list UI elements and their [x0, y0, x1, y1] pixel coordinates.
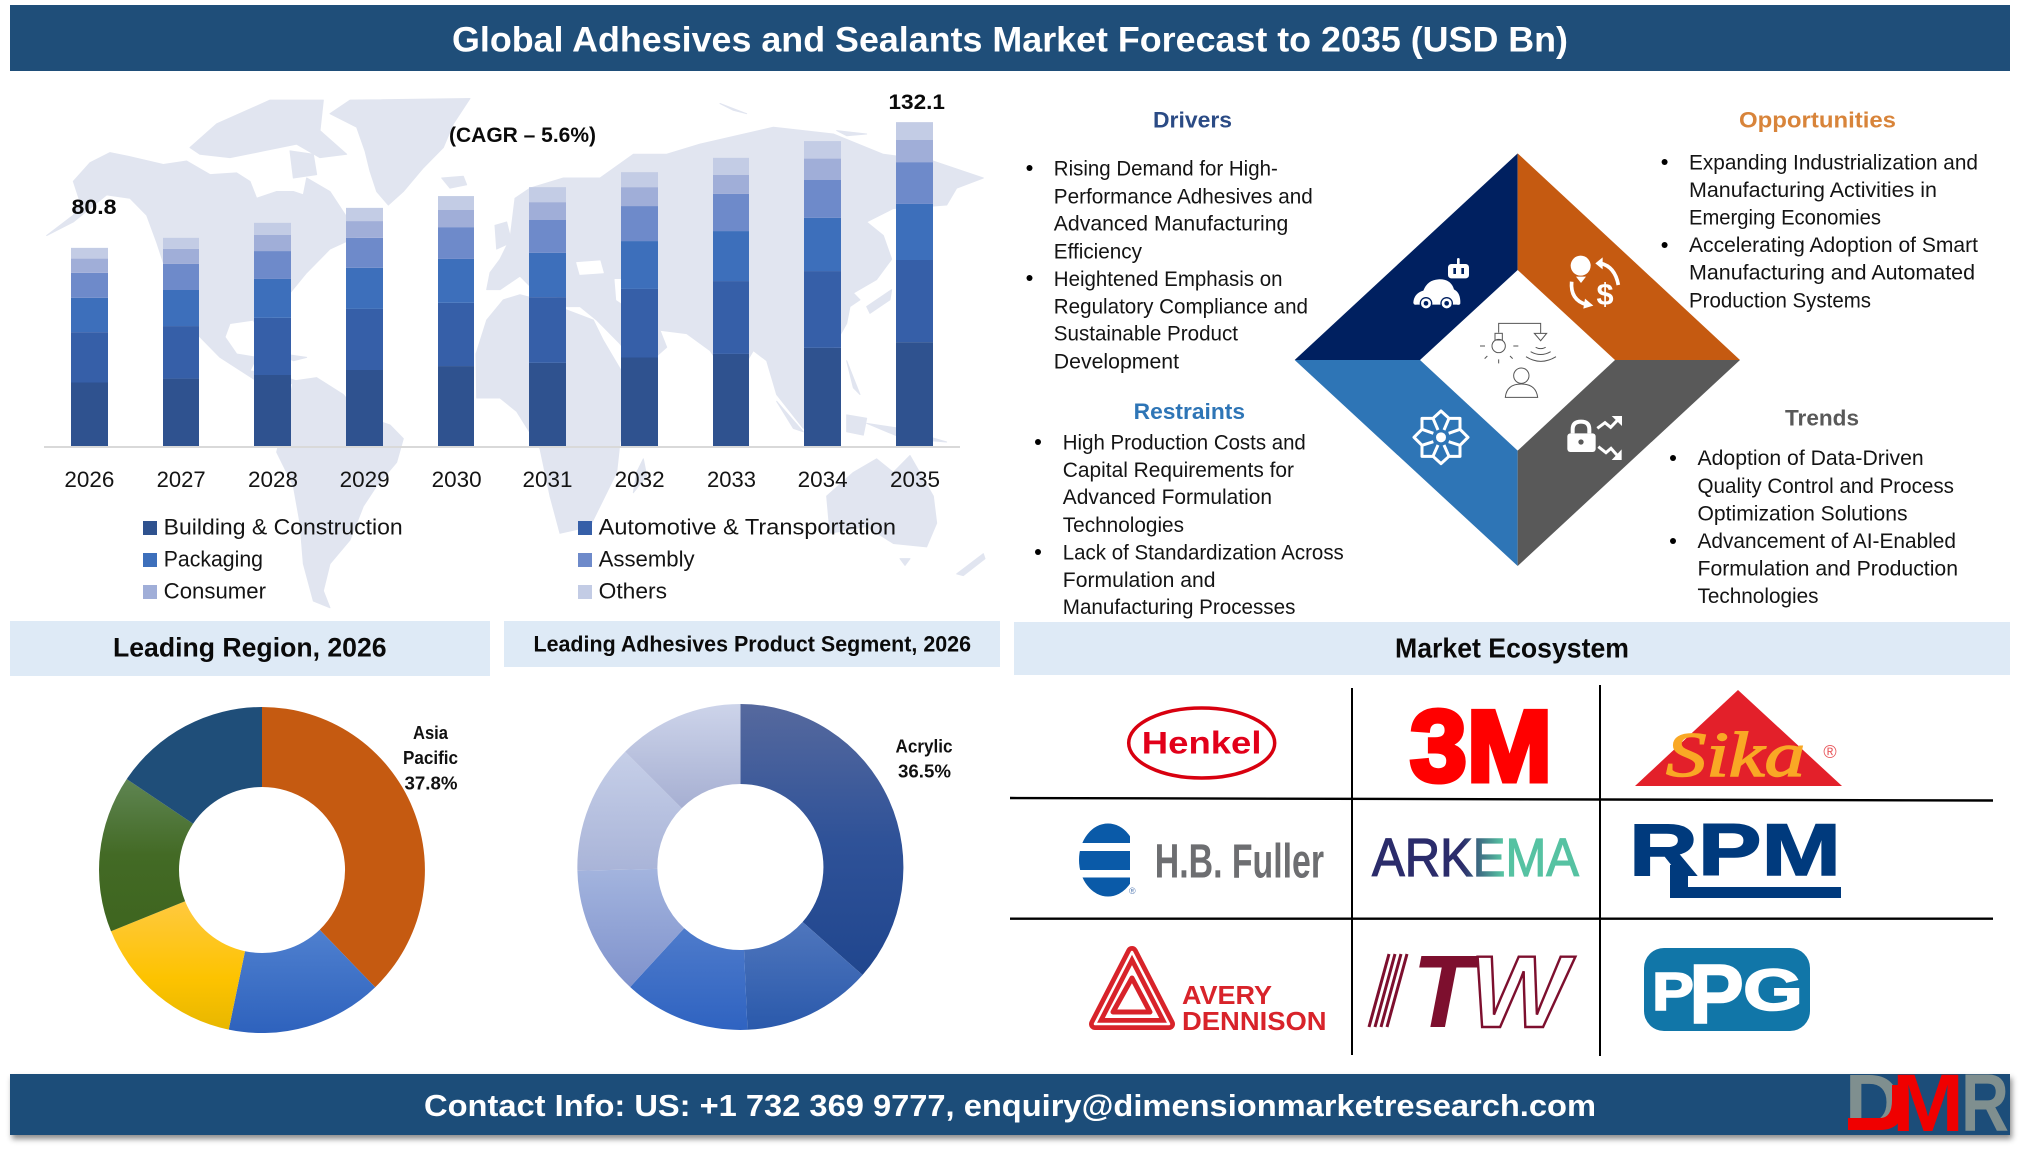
restraints list: Capital Requirements for	[1063, 459, 1294, 482]
stacked bar chart	[44, 91, 960, 492]
panel: drivers	[1026, 108, 1313, 374]
drivers list: Heightened Emphasis on	[1054, 268, 1282, 291]
logo: DMR: R	[1961, 1058, 2009, 1149]
label: acrylic: Acrylic	[896, 737, 952, 757]
drivers list: Efficiency	[1054, 241, 1142, 264]
world map background	[47, 98, 985, 608]
value label 2026: 80.8	[72, 196, 117, 219]
logo: DMR	[1845, 1058, 2009, 1149]
chart legend: Packaging	[164, 546, 263, 571]
year axis labels	[64, 467, 940, 492]
logo: henkel: Henkel	[1142, 724, 1262, 760]
logo: ppg: P	[1652, 962, 1694, 1022]
heading bar: leading product segment: Leading Adhesives Product Segment, 2026	[534, 632, 971, 656]
logo: DMR: M	[1892, 1058, 1964, 1149]
quadrant: restraints	[1295, 360, 1518, 566]
label: asia pacific: Asia	[413, 723, 449, 743]
chart legend: Assembly	[599, 546, 695, 571]
restraints list: Manufacturing Processes	[1063, 596, 1295, 619]
year axis labels: 2027	[157, 467, 206, 492]
heading bar: leading region	[10, 621, 490, 676]
icon: idea money cycle: $	[1596, 278, 1614, 312]
contact banner: Contact Info: US: +1 732 369 9777, enquiry@dimensionmarketresearch.com	[424, 1089, 1596, 1123]
logo: ppg: P	[1689, 947, 1744, 1041]
value label 2035: 132.1	[888, 91, 945, 114]
label: acrylic	[896, 737, 952, 782]
CAGR label: (CAGR – 5.6%)	[449, 124, 596, 147]
label: acrylic: 36.5%	[898, 762, 951, 782]
chart bars	[71, 122, 933, 446]
logo: avery dennison: DENNISON	[1182, 1008, 1327, 1036]
logo: ppg	[1644, 947, 1810, 1041]
logo: h.b. fuller: ®	[1129, 886, 1136, 896]
restraints list: Formulation and	[1063, 569, 1216, 592]
year axis labels: 2034	[798, 467, 848, 492]
panel: trends	[1670, 405, 1958, 608]
opportunities list: Manufacturing Activities in	[1689, 179, 1937, 202]
logo: itw	[1369, 934, 1576, 1049]
panel: opportunities	[1662, 108, 1978, 312]
market ecosystem logo grid	[1010, 685, 1993, 1056]
icon: flower network	[1414, 411, 1468, 464]
contact banner	[10, 1074, 2010, 1135]
quadrant: opportunities	[1518, 153, 1740, 360]
title banner: Global Adhesives and Sealants Market Forecast to 2035 (USD Bn)	[452, 20, 1568, 60]
label: asia pacific: Pacific	[403, 748, 458, 768]
icon: center sensor and person	[1480, 323, 1556, 397]
icon: lock and trends	[1567, 416, 1622, 460]
trends list: Technologies	[1698, 585, 1818, 608]
logo: 3M: 3M	[1410, 691, 1552, 803]
year axis labels: 2029	[340, 467, 390, 492]
logo: itw: W	[1470, 935, 1576, 1049]
restraints list	[1035, 431, 1344, 619]
quadrant: trends	[1518, 360, 1740, 566]
drivers list: Performance Adhesives and	[1054, 186, 1313, 209]
year axis labels: 2026	[64, 467, 114, 492]
logo: sika: Sika	[1666, 719, 1805, 790]
heading: opportunities: Opportunities	[1739, 108, 1896, 132]
drivers list: Advanced Manufacturing	[1054, 213, 1288, 236]
heading bar: market ecosystem: Market Ecosystem	[1395, 633, 1629, 664]
chart legend: Automotive & Transportation	[599, 514, 896, 540]
trends list: Formulation and Production	[1698, 558, 1958, 581]
restraints list: Advanced Formulation	[1063, 486, 1272, 509]
drivers list: Rising Demand for High-	[1054, 158, 1278, 181]
diamond diagram	[1295, 153, 1740, 566]
heading: trends: Trends	[1785, 405, 1859, 430]
opportunities list: Expanding Industrialization and	[1689, 151, 1978, 174]
drivers list	[1026, 158, 1313, 374]
restraints list: High Production Costs and	[1063, 431, 1306, 454]
logo: ppg: G	[1743, 958, 1803, 1023]
opportunities list: Manufacturing and Automated	[1689, 262, 1975, 285]
logo: h.b. fuller	[1075, 824, 1324, 896]
year axis labels: 2033	[707, 467, 756, 492]
heading: drivers: Drivers	[1153, 108, 1232, 132]
trends list	[1670, 447, 1958, 608]
heading bar: market ecosystem	[1014, 622, 2010, 675]
chart legend: Consumer	[164, 579, 266, 604]
logo: h.b. fuller: H.B. Fuller	[1155, 835, 1324, 888]
year axis labels: 2031	[522, 467, 572, 492]
trends list: Optimization Solutions	[1698, 503, 1908, 526]
opportunities list: Emerging Economies	[1689, 207, 1881, 230]
trends list: Adoption of Data-Driven	[1698, 447, 1924, 470]
donut chart: product segment	[577, 704, 952, 1030]
logo: sika	[1635, 690, 1842, 790]
trends list: Advancement of AI-Enabled	[1698, 530, 1956, 553]
logo: rpm: RPM	[1629, 810, 1841, 891]
opportunities list	[1662, 151, 1978, 312]
heading bar: leading product segment	[504, 621, 1000, 667]
title banner	[10, 5, 2010, 71]
chart legend: Building & Construction	[164, 514, 403, 540]
opportunities list: Accelerating Adoption of Smart	[1689, 234, 1978, 257]
donut chart: leading region	[99, 707, 458, 1033]
drivers list: Regulatory Compliance and	[1054, 296, 1308, 319]
heading bar: leading region: Leading Region, 2026	[113, 632, 387, 662]
chart legend	[143, 514, 896, 604]
logo: DMR: D	[1845, 1058, 1901, 1147]
year axis labels: 2030	[432, 467, 482, 492]
logo: avery dennison: AVERY	[1182, 982, 1272, 1010]
quadrant: drivers	[1295, 153, 1518, 360]
panel: restraints	[1035, 399, 1344, 619]
label: asia pacific	[403, 723, 458, 794]
logo: henkel	[1129, 708, 1275, 778]
drivers list: Sustainable Product	[1054, 323, 1238, 346]
label: asia pacific: 37.8%	[404, 774, 458, 794]
heading: restraints: Restraints	[1134, 399, 1245, 424]
logo: arkema: ARKEMA	[1372, 828, 1579, 888]
trends list: Quality Control and Process	[1698, 475, 1954, 498]
chart legend: Others	[599, 579, 667, 604]
opportunities list: Production Systems	[1689, 290, 1871, 312]
icon: idea money cycle	[1571, 256, 1618, 312]
logo: sika: ®	[1823, 742, 1837, 762]
logo: itw: T	[1412, 934, 1482, 1049]
restraints list: Lack of Standardization Across	[1063, 542, 1344, 565]
year axis labels: 2032	[615, 467, 665, 492]
year axis labels: 2028	[248, 467, 298, 492]
restraints list: Technologies	[1063, 514, 1184, 537]
icon: robot car	[1413, 258, 1469, 310]
logo: avery dennison	[1095, 952, 1327, 1036]
drivers list: Development	[1054, 351, 1179, 374]
year axis labels: 2035	[890, 467, 940, 492]
